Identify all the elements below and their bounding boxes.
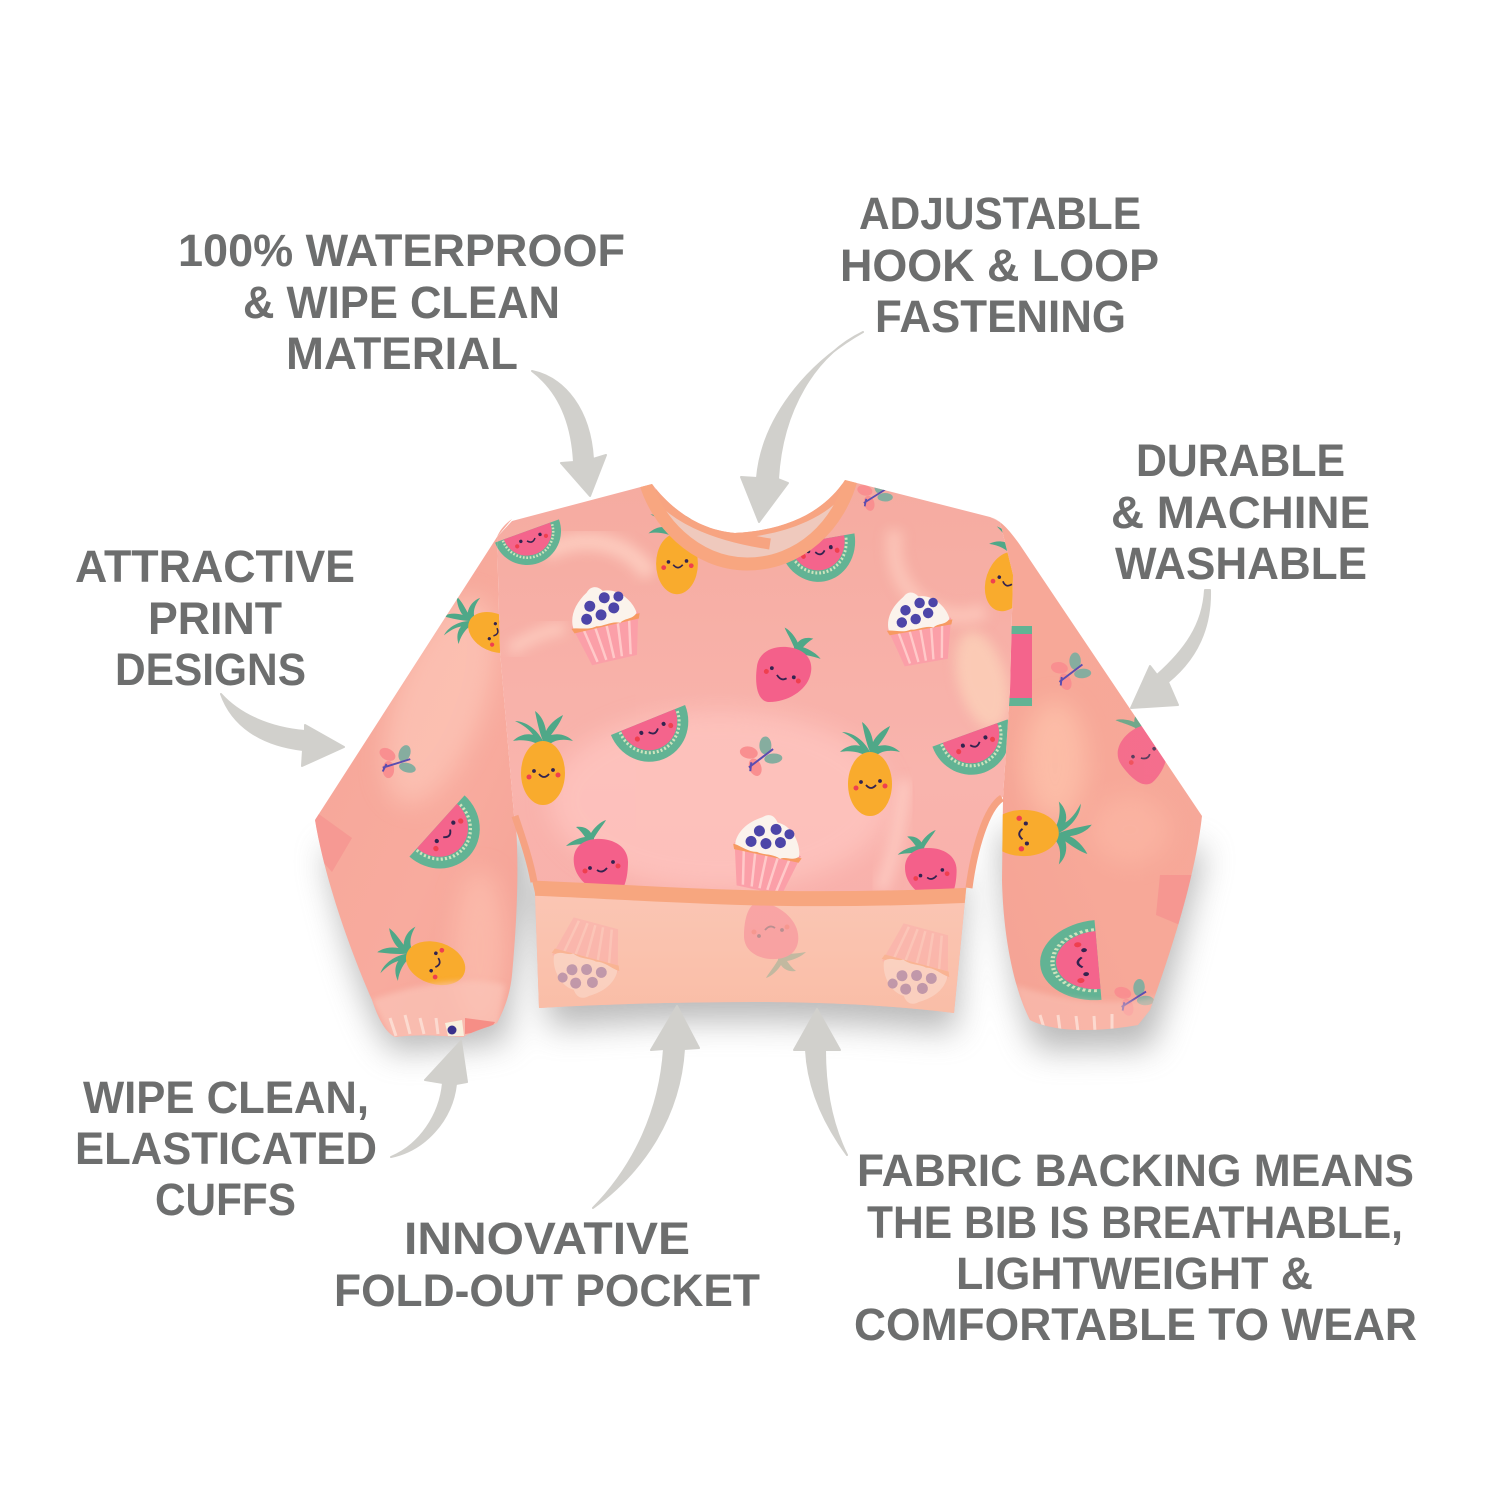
callout text: cuffs: ELASTICATED bbox=[75, 1123, 377, 1174]
fold-out pocket bbox=[535, 896, 965, 1013]
arrow: fastening bbox=[741, 332, 863, 522]
bib body bbox=[497, 480, 1013, 1013]
side binding bbox=[515, 798, 1002, 888]
callout text: pocket bbox=[334, 1213, 760, 1316]
callout text: fabric backing: COMFORTABLE TO WEAR bbox=[854, 1299, 1417, 1350]
callout text: cuffs bbox=[75, 1072, 377, 1225]
callout text: durable: & MACHINE bbox=[1111, 487, 1370, 538]
arrow: waterproof bbox=[532, 371, 606, 496]
callout text: print designs: ATTRACTIVE bbox=[75, 541, 355, 592]
bib illustration bbox=[300, 470, 1220, 1060]
callout text: durable: DURABLE bbox=[1136, 435, 1345, 486]
callout text: fastening: HOOK & LOOP bbox=[840, 240, 1159, 291]
callout text: waterproof bbox=[178, 225, 625, 379]
callout text: fabric backing: THE BIB IS BREATHABLE, bbox=[867, 1197, 1403, 1248]
callout text: durable: WASHABLE bbox=[1115, 538, 1367, 589]
neck binding bbox=[645, 476, 852, 564]
callout text: print designs: DESIGNS bbox=[115, 644, 306, 695]
callout text: fabric backing: LIGHTWEIGHT & bbox=[956, 1248, 1313, 1299]
callout text: waterproof: 100% WATERPROOF bbox=[178, 225, 625, 276]
callout text: pocket: INNOVATIVE bbox=[404, 1213, 690, 1264]
callout text: print designs: PRINT bbox=[148, 593, 282, 644]
arrow: fabric backing bbox=[794, 1009, 847, 1155]
print: fruit on left sleeve bbox=[315, 542, 500, 986]
arrow: cuffs bbox=[391, 1041, 467, 1157]
right sleeve bbox=[990, 517, 1202, 1030]
print: fruit on bib bbox=[497, 485, 1013, 891]
print: fruit on right sleeve bbox=[988, 626, 1195, 1018]
callout text: fastening bbox=[840, 188, 1159, 342]
arrow: print designs bbox=[221, 694, 344, 766]
neck opening inner back bbox=[666, 505, 834, 558]
callout text: fabric backing bbox=[854, 1145, 1417, 1350]
callout text: fastening: ADJUSTABLE bbox=[859, 188, 1141, 239]
callout text: durable bbox=[1111, 435, 1370, 589]
callout text: fastening: FASTENING bbox=[875, 291, 1126, 342]
elastic cuff bbox=[372, 981, 505, 1040]
left sleeve bbox=[315, 519, 518, 1037]
callout text: cuffs: CUFFS bbox=[155, 1174, 296, 1225]
callout text: cuffs: WIPE CLEAN, bbox=[83, 1072, 369, 1123]
arrow: pocket bbox=[593, 1006, 699, 1208]
pocket band bbox=[528, 888, 975, 899]
elastic cuff bbox=[1018, 986, 1154, 1030]
arrow: durable bbox=[1131, 590, 1210, 708]
callout text: waterproof: & WIPE CLEAN bbox=[243, 277, 560, 328]
drop shadow bbox=[325, 830, 1205, 1052]
callout text: waterproof: MATERIAL bbox=[286, 328, 518, 379]
callout text: fabric backing: FABRIC BACKING MEANS bbox=[857, 1145, 1414, 1196]
callout text: pocket: FOLD-OUT POCKET bbox=[334, 1265, 760, 1316]
callout text: print designs bbox=[75, 541, 355, 695]
